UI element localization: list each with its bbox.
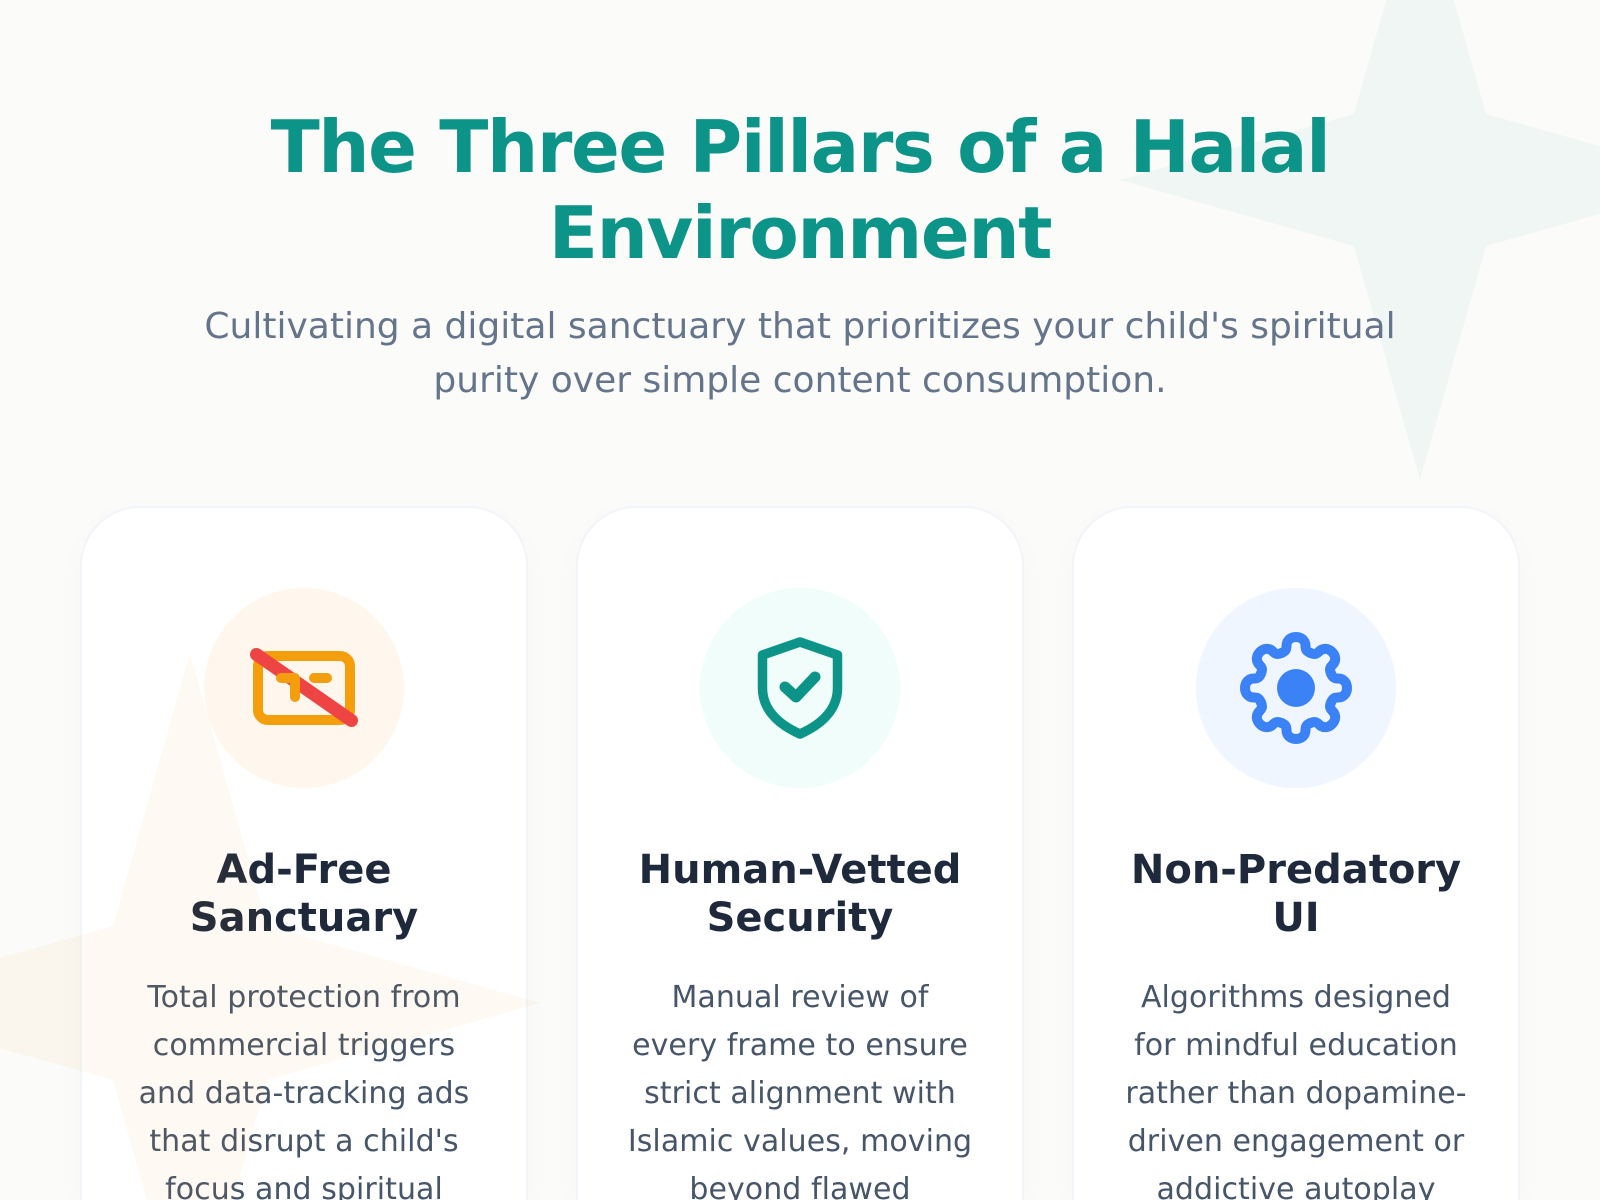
card heading: UI xyxy=(1272,895,1320,941)
subtitle: Cultivating a digital sanctuary that prioritizes your child's spiritual xyxy=(204,306,1396,347)
icon: gear xyxy=(1196,588,1396,788)
subtitle xyxy=(204,306,1396,401)
decorative star: bottom left xyxy=(0,654,539,1200)
icon: crossed-out advertisement xyxy=(204,588,404,788)
subtitle: purity over simple content consumption. xyxy=(433,360,1167,401)
title xyxy=(270,105,1329,275)
card description: for mindful education xyxy=(1134,1028,1458,1063)
card description: and data-tracking ads xyxy=(139,1076,469,1111)
card description: Total protection from xyxy=(147,980,461,1015)
card description: strict alignment with xyxy=(644,1076,956,1111)
card heading: Non-Predatory xyxy=(1131,847,1461,893)
card heading xyxy=(190,847,418,941)
card description: Manual review of xyxy=(671,980,928,1015)
card heading: Human-Vetted xyxy=(639,847,961,893)
card description: Islamic values, moving xyxy=(628,1124,972,1159)
icon: shield with check xyxy=(700,588,900,788)
card description: rather than dopamine- xyxy=(1125,1076,1467,1111)
card description: driven engagement or xyxy=(1128,1124,1464,1159)
card heading: Security xyxy=(707,895,893,941)
decorative star: top right xyxy=(1121,0,1600,479)
title: The Three Pillars of a Halal xyxy=(271,105,1329,189)
card heading xyxy=(1131,847,1461,941)
panel: human-vetted security xyxy=(576,506,1024,1200)
card description xyxy=(1125,980,1467,1200)
panel: ad-free sanctuary xyxy=(80,506,528,1200)
card description xyxy=(139,980,469,1200)
card description: every frame to ensure xyxy=(632,1028,968,1063)
card description: commercial triggers xyxy=(153,1028,455,1063)
panel: non-predatory UI xyxy=(1072,506,1520,1200)
card description: Algorithms designed xyxy=(1141,980,1451,1015)
card description xyxy=(628,980,972,1200)
title: Environment xyxy=(549,191,1051,275)
card heading: Sanctuary xyxy=(190,895,418,941)
card heading: Ad-Free xyxy=(217,847,391,893)
card heading xyxy=(639,847,961,941)
card description: that disrupt a child's xyxy=(149,1124,459,1159)
